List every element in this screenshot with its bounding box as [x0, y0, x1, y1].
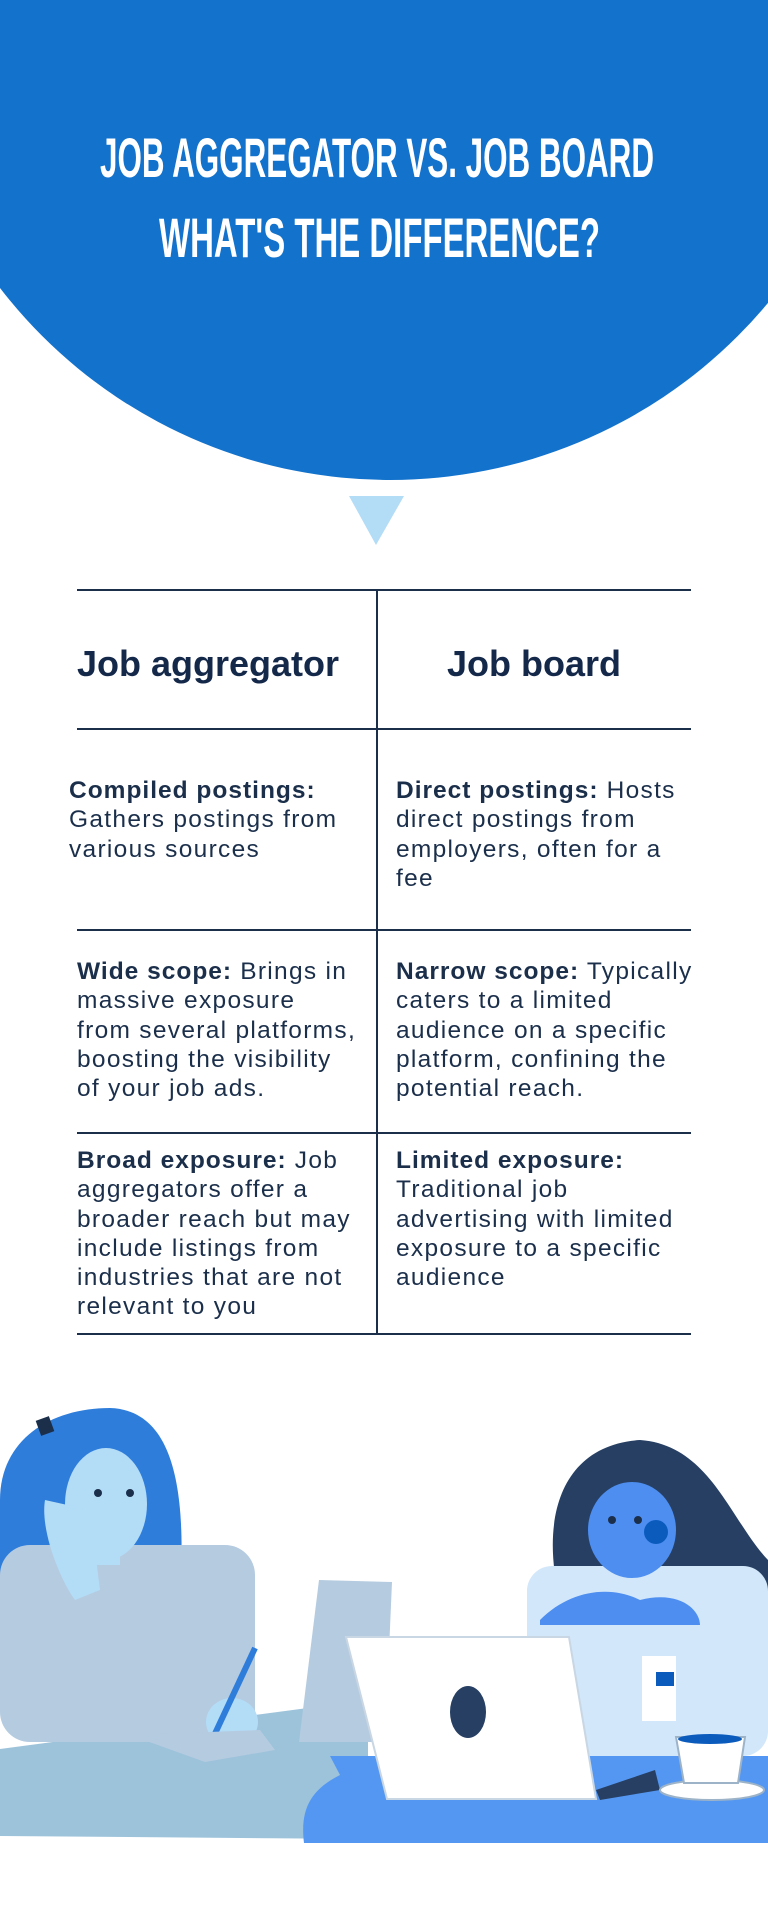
cell: narrow scope: audience on a specific [396, 1017, 667, 1044]
cell: limited exposure: audience [396, 1264, 506, 1291]
cell: broad exposure: include listings from [77, 1235, 319, 1262]
cell: wide scope: massive exposure [77, 987, 295, 1014]
cell: narrow scope: caters to a limited [396, 987, 613, 1014]
cell: compiled postings: Gathers postings from [69, 806, 337, 833]
cell: wide scope: from several platforms, [77, 1017, 356, 1044]
cell: direct postings: fee [396, 865, 434, 892]
cell: wide scope: boosting the visibility [77, 1046, 332, 1073]
right laptop with strawberry [346, 1637, 660, 1800]
cell: narrow scope: platform, confining the [396, 1046, 667, 1073]
title [100, 126, 654, 269]
cell: broad exposure: aggregators offer a [77, 1176, 308, 1203]
coffee cup [660, 1734, 764, 1800]
cell: limited exposure [396, 1147, 674, 1291]
cell: compiled postings [69, 777, 337, 863]
cell: limited exposure: exposure to a specific [396, 1235, 662, 1262]
cell: wide scope [77, 958, 356, 1102]
cell: narrow scope [396, 958, 692, 1102]
cell: direct postings: Direct postings: Hosts [396, 777, 676, 804]
cell: broad exposure: broader reach but may [77, 1206, 351, 1233]
header: job aggregator: Job aggregator [77, 643, 339, 684]
cell: direct postings: employers, often for a [396, 836, 662, 863]
cell: limited exposure: Traditional job [396, 1176, 568, 1203]
cell: broad exposure [77, 1147, 351, 1320]
left desk [0, 1700, 368, 1839]
cell: broad exposure: relevant to you [77, 1293, 257, 1320]
right blue desk [303, 1756, 768, 1843]
cell: wide scope: Wide scope: Brings in [77, 958, 347, 985]
cell: compiled postings: Compiled postings: [69, 777, 316, 804]
cell: limited exposure: Limited exposure: [396, 1147, 624, 1174]
header: job board: Job board [447, 643, 621, 684]
cell: direct postings: direct postings from [396, 806, 636, 833]
arrow: down triangle [349, 496, 404, 545]
table grid [77, 590, 691, 1334]
cell: direct postings [396, 777, 676, 892]
cell: broad exposure: Broad exposure: Job [77, 1147, 338, 1174]
cell: narrow scope: Narrow scope: Typically [396, 958, 692, 985]
illustration [0, 1408, 768, 1843]
right woman [527, 1440, 768, 1756]
cell: wide scope: of your job ads. [77, 1075, 265, 1102]
cell: limited exposure: advertising with limited [396, 1206, 674, 1233]
cell: broad exposure: industries that are not [77, 1264, 343, 1291]
header circle [0, 0, 768, 480]
cell: narrow scope: potential reach. [396, 1075, 584, 1102]
left laptop [299, 1580, 392, 1742]
left woman [0, 1408, 275, 1762]
cell: compiled postings: various sources [69, 836, 260, 863]
